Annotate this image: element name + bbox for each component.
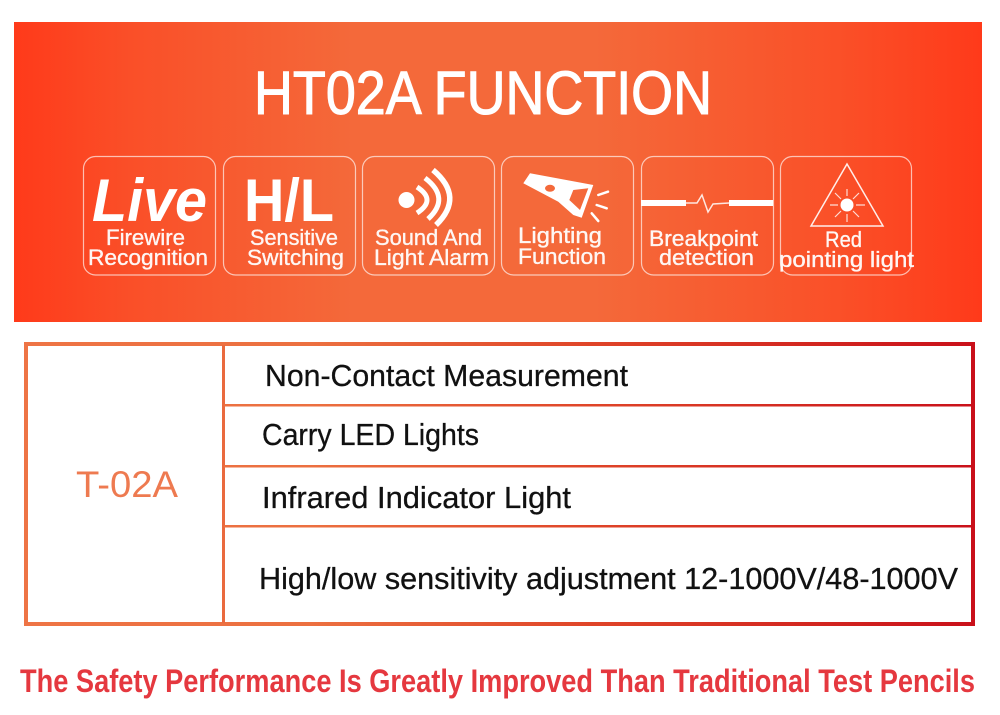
feature card: live firewire recognition: Firewire — [106, 225, 185, 250]
feature card: live firewire recognition: Recognition — [88, 245, 208, 270]
feature card: live firewire recognition: Live — [92, 167, 207, 234]
feature card: H/L sensitive switching: Sensitive — [250, 225, 338, 250]
icon: flashlight — [523, 173, 608, 221]
feature card: breakpoint detection — [641, 156, 774, 275]
feature card: red pointing light: Red — [825, 227, 862, 252]
icon: laser warning triangle — [811, 164, 883, 226]
icon: broken wire — [641, 195, 773, 212]
feature row: LED lights: Carry LED Lights — [262, 417, 479, 452]
banner panel — [14, 22, 982, 322]
banner title: HT02A FUNCTION — [254, 59, 712, 127]
feature card: breakpoint detection: Breakpoint — [649, 226, 758, 251]
feature card: live firewire recognition — [84, 156, 216, 275]
feature row: sensitivity: High/low sensitivity adjustment 12-1000V/48-1000V — [259, 561, 958, 596]
feature row: non-contact: Non-Contact Measurement — [265, 358, 628, 393]
feature card: red pointing light: pointing light — [779, 247, 914, 272]
feature card: red pointing light — [779, 156, 914, 275]
feature card: lighting function: Function — [518, 244, 606, 269]
feature row: infrared: Infrared Indicator Light — [262, 480, 571, 515]
model label: T-02A — [76, 464, 178, 505]
feature card: sound and light alarm — [362, 156, 494, 275]
comparison table — [26, 344, 973, 624]
feature card: breakpoint detection: detection — [659, 245, 754, 270]
feature card: H/L sensitive switching: Switching — [247, 245, 344, 270]
feature card: sound and light alarm: Sound And — [375, 225, 482, 250]
feature card: sound and light alarm: Light Alarm — [374, 245, 489, 270]
feature card: lighting function — [502, 156, 634, 275]
icon: sound waves — [398, 170, 450, 225]
feature card: H/L sensitive switching: H/L — [244, 167, 334, 234]
feature card: lighting function: Lighting — [518, 223, 602, 248]
feature card: H/L sensitive switching — [224, 156, 356, 275]
